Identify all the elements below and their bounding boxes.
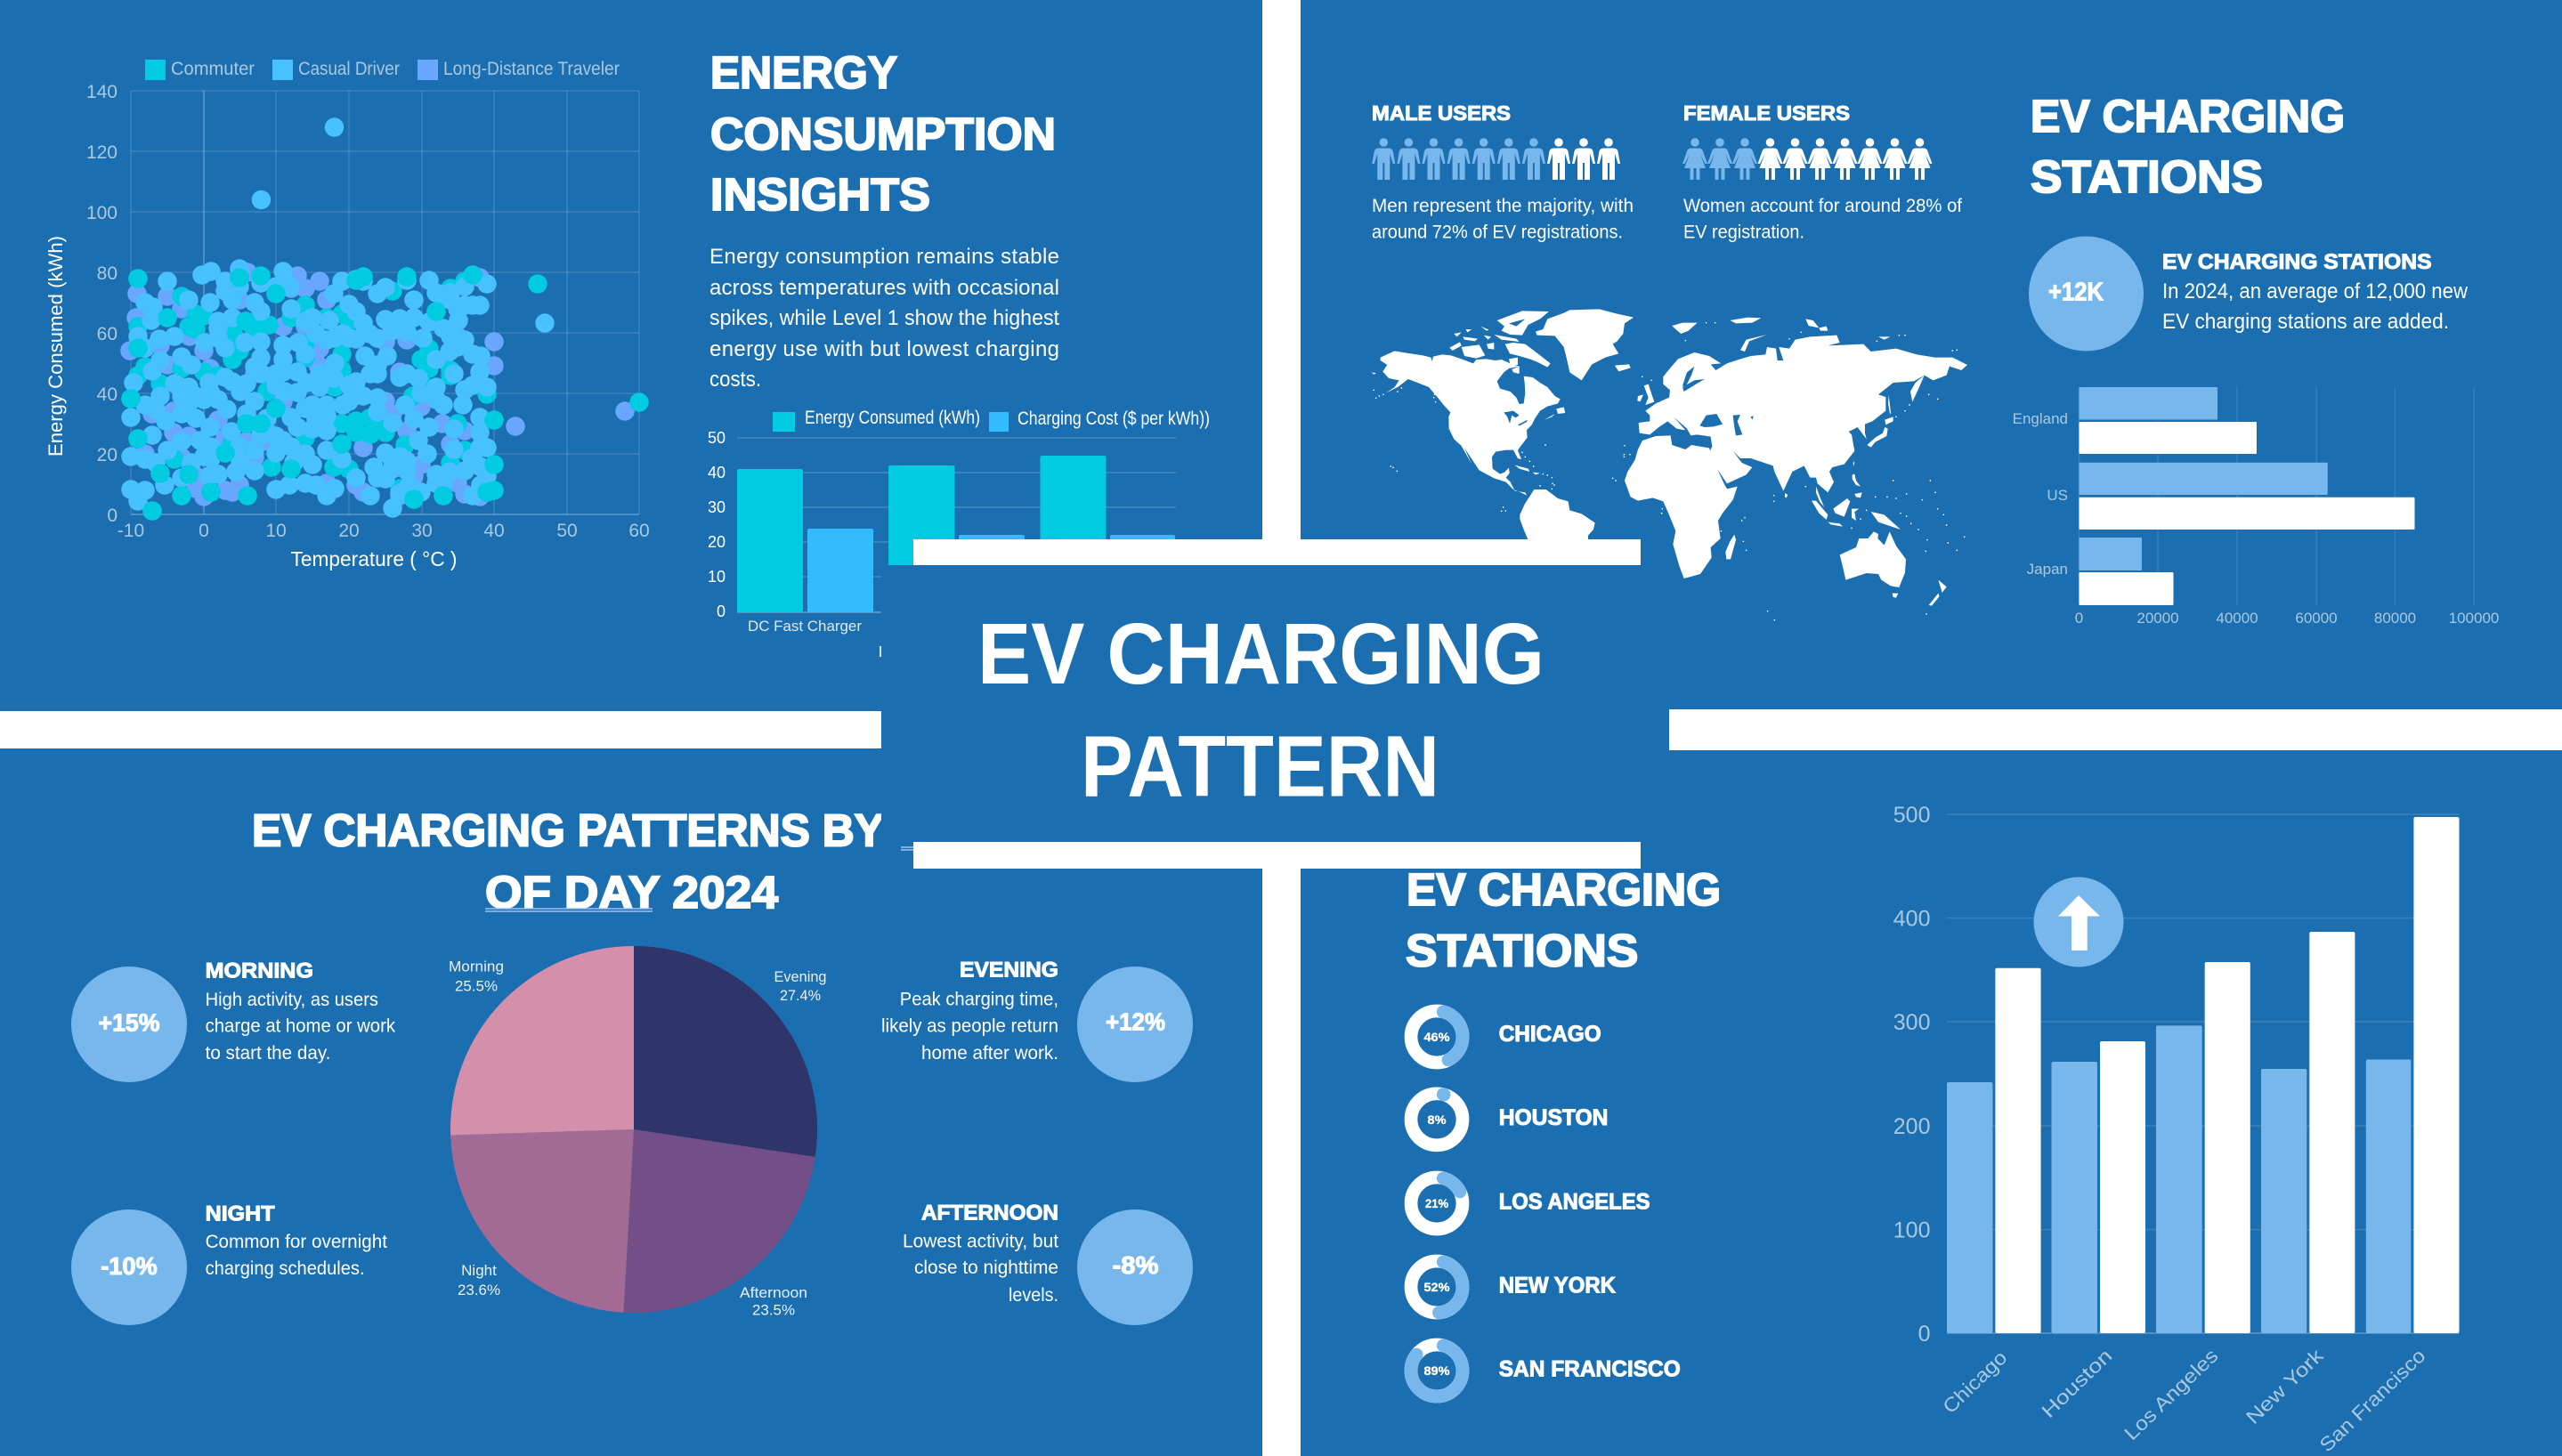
donut row: Houston: 8% [1428,1112,1447,1127]
panel: temperature vs energy scatter chart [45,59,650,570]
callout: evening: home after work. [921,1043,1058,1064]
heading: energy consumption insights: INSIGHTS [710,169,930,220]
rotated city labels: Los Angeles [2120,1345,2222,1444]
callout text: new stations: EV charging stations are added. [2162,310,2449,334]
heading: patterns by time of day: EV CHARGING PATTERNS BY [252,805,884,856]
callout: morning: High activity, as users [206,990,378,1010]
pie chart: share of charging by time of day: 25.5% [455,977,498,995]
male users block: around 72% of EV registrations. [1372,222,1623,242]
column chart y axis labels: 100 [1893,1217,1930,1242]
horizontal bar chart: stations by country: 100000 [2449,610,2499,627]
main title [977,605,1544,815]
female users block: FEMALE USERS [1683,101,1850,125]
callout: afternoon: -8% [1113,1251,1159,1279]
bar chart: energy and cost by charger: 50 [708,429,726,447]
donut row: Houston: HOUSTON [1499,1105,1608,1130]
heading: EV charging stations by city: EV CHARGING [1407,864,1721,915]
paragraph: energy summary: Energy consumption remains stable [709,245,1059,269]
horizontal bar chart: stations by country [2013,387,2499,627]
bar chart: energy and cost by charger: 10 [708,568,726,586]
columns: San Francisco [2366,817,2459,1333]
columns: Houston [2051,1041,2145,1333]
paragraph: energy summary: across temperatures with occasional [709,276,1059,300]
rotated city labels: Chicago [1938,1347,2011,1418]
callout: morning: to start the day. [206,1043,330,1064]
female users block: Women account for around 28% of [1683,196,1962,216]
pie chart: share of charging by time of day: 23.5% [752,1301,795,1319]
horizontal bar chart: stations by country: England [2013,410,2068,427]
bar chart legend [773,408,1210,432]
callout: morning [71,959,395,1082]
paragraph: energy summary: costs. [709,368,761,392]
bar chart: energy and cost by charger [708,429,1176,657]
donut row: Los Angeles: 21% [1425,1196,1449,1210]
callout: night: NIGHT [206,1201,275,1225]
horizontal bar chart: stations by country: 60000 [2295,610,2338,627]
scatter y axis labels: 20 [97,445,118,465]
callout text: new stations: In 2024, an average of 12,000 new [2162,279,2469,303]
horizontal bar chart: stations by country: 0 [2075,610,2083,627]
horizontal bar chart: stations by country: 20000 [2136,610,2179,627]
slice: morning [450,946,634,1136]
scatter x axis labels: 40 [483,521,505,541]
main title: EV CHARGING [977,605,1544,702]
scatter y axis labels [86,82,118,526]
column chart y axis labels: 500 [1893,803,1930,828]
scatter y axis labels: 100 [86,203,118,223]
bar chart: energy and cost by charger: DC Fast Charger [748,618,862,635]
callout: morning: +15% [98,1009,160,1036]
callout: afternoon: Lowest activity, but [903,1232,1058,1252]
bar chart: energy and cost by charger: 30 [708,498,726,516]
scatter legend: Commuter [171,59,255,79]
callout: evening: EVENING [960,959,1058,983]
scatter x axis labels: 30 [411,521,433,541]
bar chart: energy and cost by charger: 20 [708,533,726,551]
pie chart: share of charging by time of day [449,946,826,1319]
callout: +12K badge [2029,237,2144,351]
rotated city labels [1938,1344,2429,1456]
callout: evening: Peak charging time, [900,990,1058,1009]
column chart y axis labels: 400 [1893,906,1930,931]
heading: EV charging stations [2031,91,2345,202]
scatter y axis labels: 40 [97,384,118,405]
bar chart legend: Charging Cost ($ per kWh)) [1018,408,1210,429]
callout: night [71,1201,387,1325]
callout: afternoon: AFTERNOON [921,1201,1058,1225]
rotated city labels: New York [2242,1344,2328,1428]
paragraph: energy summary: energy use with but lowest charging [709,337,1059,361]
columns: Chicago [1947,968,2041,1333]
heading: patterns by time of day [252,805,917,918]
column chart y axis labels [1893,803,1930,1347]
scatter x axis labels: 0 [199,521,209,541]
scatter x axis labels: 20 [338,521,360,541]
paragraph: energy summary [709,245,1059,392]
heading: energy consumption insights: CONSUMPTION [710,109,1056,159]
scatter y axis labels: 140 [86,82,118,102]
scatter x axis labels [118,521,650,541]
callout: afternoon: levels. [1009,1285,1058,1306]
pie chart: share of charging by time of day: Evening [774,968,826,985]
column chart y axis labels: 300 [1893,1010,1930,1035]
callout: night: Common for overnight [206,1232,387,1252]
donut row: Los Angeles: LOS ANGELES [1499,1190,1650,1215]
scatter x axis labels: 60 [628,521,650,541]
slice: night [450,1129,634,1313]
donut row: San Francisco: SAN FRANCISCO [1499,1356,1681,1381]
columns: Los Angeles [2156,962,2250,1333]
scatter y axis labels: 60 [97,324,118,344]
callout: morning: charge at home or work [206,1016,395,1036]
heading: EV charging stations by city: STATIONS [1406,926,1638,976]
panel: city column chart [1893,803,2459,1456]
scatter x axis labels: 50 [556,521,578,541]
heading: EV charging stations: EV CHARGING [2031,91,2345,142]
rotated city labels: San Francisco [2315,1345,2429,1456]
slice: afternoon [623,1129,815,1313]
column chart y axis labels: 0 [1918,1322,1930,1347]
columns: New York [2261,932,2355,1333]
donut row: San Francisco [1406,1339,1681,1402]
panel: EV charging stations summary [2013,91,2499,627]
paragraph: energy summary: spikes, while Level 1 show the highest [709,306,1059,330]
horizontal bar chart: stations by country: 80000 [2374,610,2416,627]
callout text: new stations: EV CHARGING STATIONS [2162,250,2432,274]
pie chart: share of charging by time of day: 23.6% [458,1282,500,1298]
heading: energy consumption insights: ENERGY [710,47,897,98]
scatter y axis labels: 0 [107,506,118,526]
callout: night: -10% [101,1252,158,1280]
callout: evening [881,959,1193,1082]
center title block [881,565,1669,842]
scatter y axis labels: 80 [97,263,118,284]
scatter x axis labels: 10 [265,521,287,541]
donut row: New York: 52% [1424,1280,1450,1294]
callout: morning: MORNING [206,959,313,983]
callout: +12K badge: +12K [2048,278,2104,306]
scatter legend [145,59,620,80]
icon row: female pictograms [1682,138,1932,180]
panel: users and world map [1372,101,1967,620]
male users block: Men represent the majority, with [1372,196,1634,216]
donut row: New York: NEW YORK [1499,1274,1616,1298]
icon row: male pictograms [1372,138,1620,180]
heading: patterns by time of day: OF DAY 2024 [485,867,779,918]
callout: night: charging schedules. [206,1258,365,1279]
donut row: Chicago [1406,1006,1601,1068]
rotated city labels: Houston [2037,1345,2116,1422]
heading: EV charging stations: STATIONS [2031,151,2263,202]
female users block [1682,101,1962,242]
pie chart: share of charging by time of day: 27.4% [780,987,821,1004]
callout: afternoon: close to nighttime [914,1258,1058,1278]
pie chart: share of charging by time of day: Morning [449,959,504,975]
panel: charging patterns by time of day [71,805,1193,1325]
slice: evening [634,946,817,1157]
scatter legend: Long-Distance Traveler [443,59,620,79]
callout: afternoon [903,1201,1193,1325]
bar chart legend: Energy Consumed (kWh) [805,408,980,428]
panel: stations by city list [1406,864,1721,1402]
donut row: New York [1406,1256,1616,1318]
donut row: Chicago: 46% [1424,1030,1450,1044]
donut row: Chicago: CHICAGO [1499,1022,1601,1047]
panel: energy consumption insights [708,47,1210,657]
callout text: new stations [2162,250,2469,334]
main title: PATTERN [1081,718,1439,815]
donut row: Los Angeles [1406,1172,1650,1234]
scatter legend: Casual Driver [298,59,400,79]
horizontal bar chart: stations by country: Japan [2027,561,2068,578]
bar chart: energy and cost by charger: 40 [708,464,726,481]
bar chart: energy and cost by charger: 0 [717,603,726,620]
donut row: Houston [1406,1088,1608,1151]
callout: evening: likely as people return [881,1016,1058,1037]
horizontal bar chart: stations by country: 40000 [2216,610,2258,627]
world map [1372,309,1967,620]
male users block [1372,101,1634,242]
pie chart: share of charging by time of day: Night [461,1262,497,1279]
icon: up arrow badge [2033,878,2124,967]
scatter points [130,127,639,511]
female users block: EV registration. [1683,222,1804,242]
scatter y axis labels: 120 [86,142,118,163]
pie chart: share of charging by time of day: Afternoon [740,1284,807,1301]
column chart y axis labels: 200 [1893,1114,1930,1139]
heading: EV charging stations by city [1406,864,1721,976]
horizontal bar chart: stations by country: US [2047,487,2068,504]
male users block: MALE USERS [1372,101,1511,125]
heading: energy consumption insights [710,47,1056,220]
x axis title: Temperature ( °C ) [290,547,458,570]
y axis title: Energy Consumed (kWh) [45,236,67,457]
donut row: San Francisco: 89% [1424,1363,1450,1378]
scatter x axis labels: -10 [118,521,144,541]
callout: evening: +12% [1106,1007,1165,1036]
